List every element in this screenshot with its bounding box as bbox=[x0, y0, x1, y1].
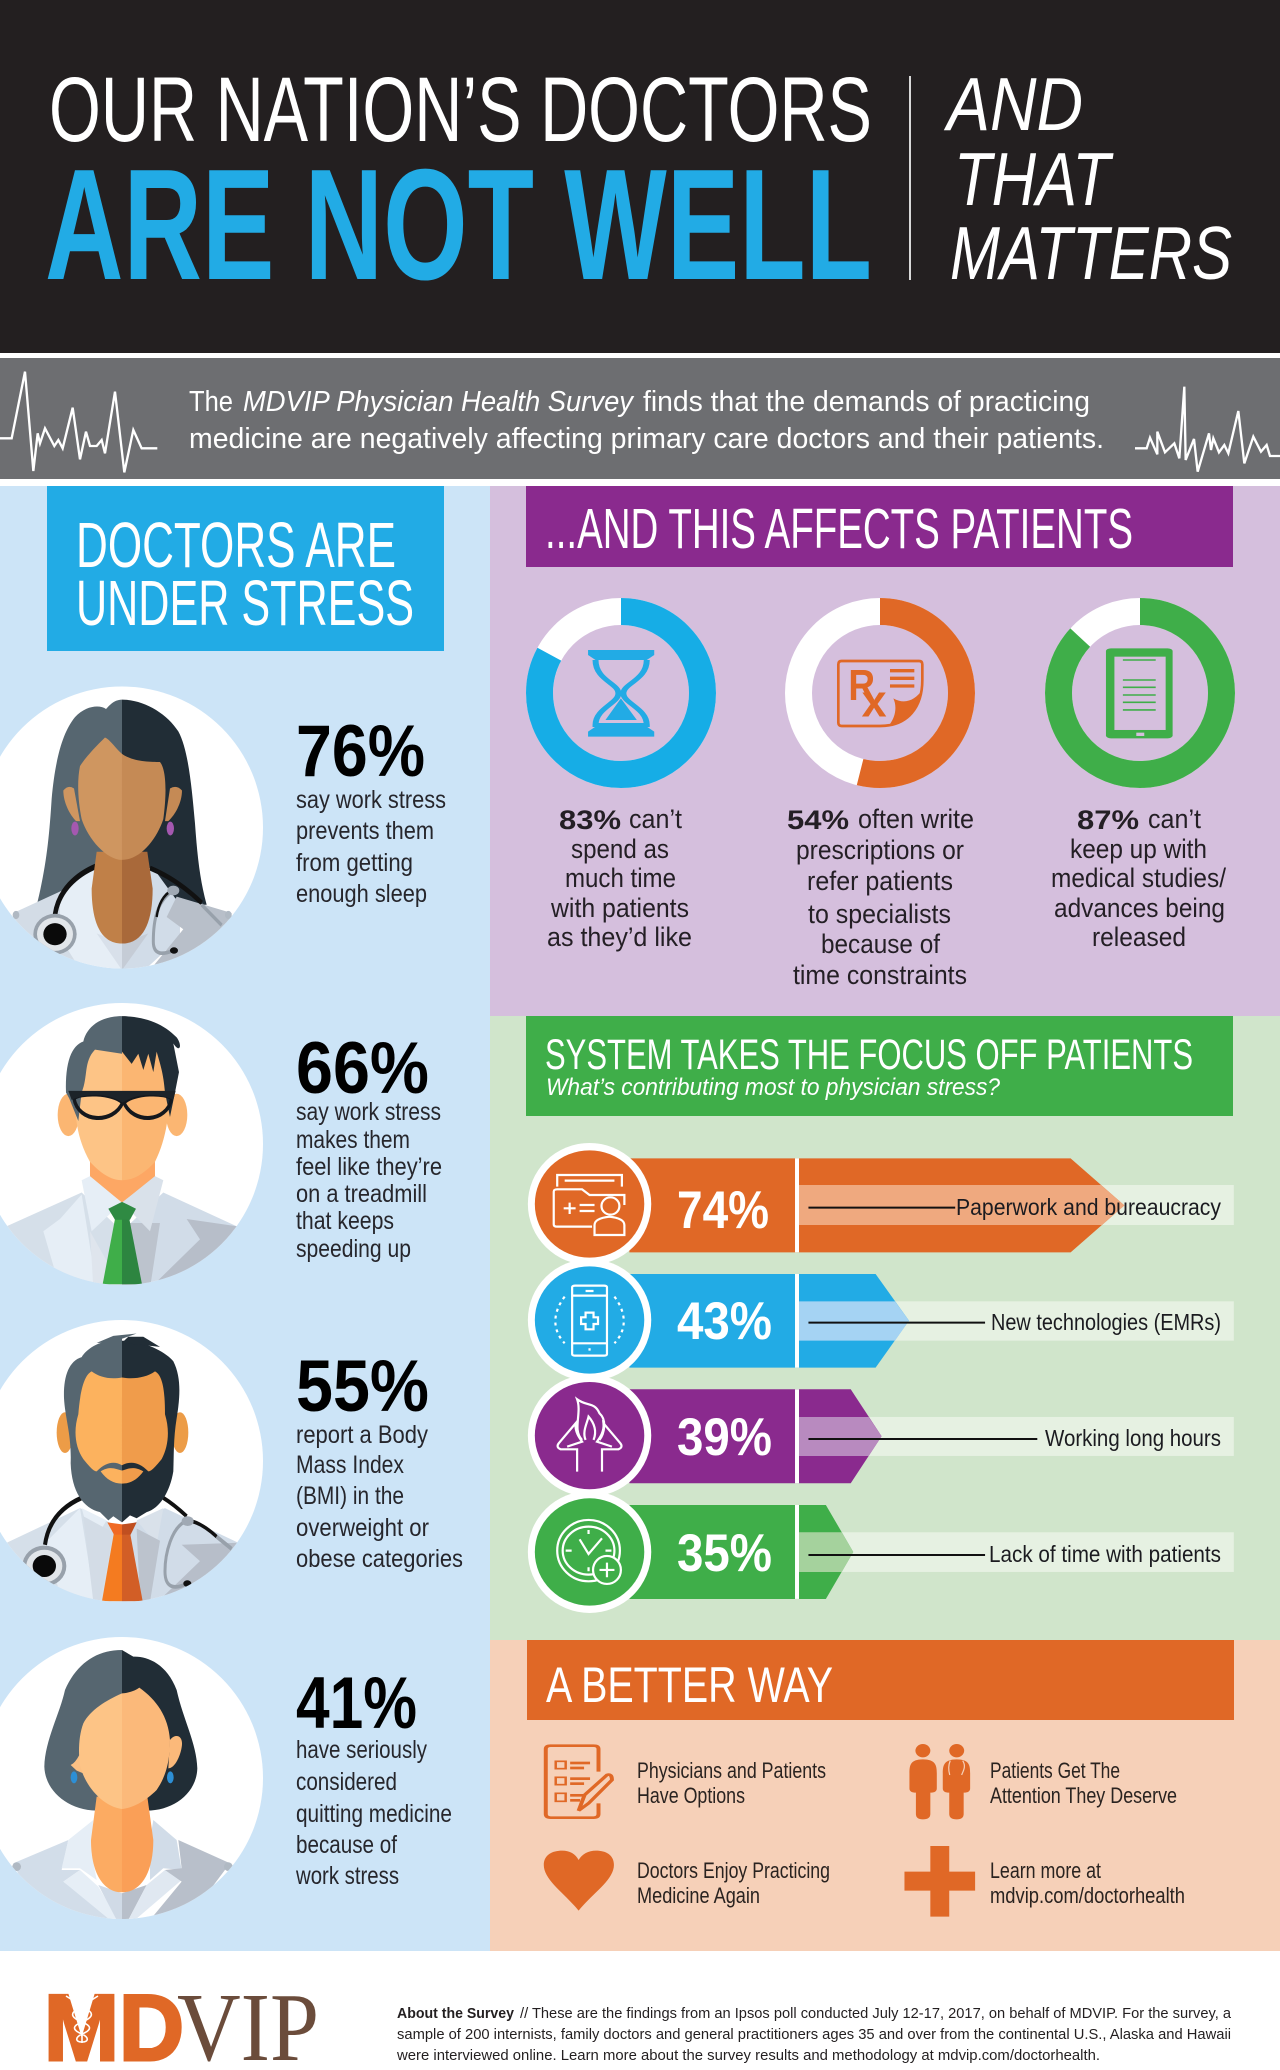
icon: right heartbeat line bbox=[1135, 387, 1280, 472]
item: enjoy medicine bbox=[544, 1851, 830, 1911]
stat 55%: 55% bbox=[296, 1346, 429, 1427]
doctor portrait 4 bbox=[0, 1637, 263, 1920]
title line one: OUR NATION’S DOCTORS bbox=[49, 59, 872, 161]
text: Doctors Enjoy Practicing bbox=[637, 1858, 830, 1883]
icon: tablet bbox=[1106, 648, 1173, 738]
stat 76% bbox=[296, 711, 446, 908]
about the survey text: sample of 200 internists, family doctors and general practitioners ages 35 and over from the continental U.S., Alaska and Hawaii bbox=[397, 2027, 1231, 2043]
stat 76%: enough sleep bbox=[296, 880, 427, 908]
intro text: MDVIP Physician Health Survey bbox=[243, 386, 634, 418]
stat 55%: (BMI) in the bbox=[296, 1482, 404, 1510]
header banner bbox=[0, 0, 1280, 353]
icon: prescription: R bbox=[848, 662, 875, 710]
intro text: medicine are negatively affecting primary care doctors and their patients. bbox=[189, 423, 1104, 455]
stat 76%: prevents them bbox=[296, 817, 434, 845]
bar: new technologies 43% bbox=[528, 1259, 1234, 1381]
about the survey text: // These are the findings from an Ipsos poll conducted July 12-17, 2017, on behalf of MDVIP. For the survey, a bbox=[520, 2006, 1232, 2022]
item: options bbox=[546, 1746, 826, 1818]
bar: paperwork 74% bbox=[528, 1143, 1234, 1265]
bar: working long hours 39%: Working long hours bbox=[1045, 1425, 1221, 1451]
text: refer patients bbox=[807, 866, 953, 896]
doctor portrait 2 bbox=[0, 1003, 263, 1288]
side title bbox=[944, 62, 1232, 295]
bar: working long hours 39%: 39% bbox=[677, 1408, 772, 1467]
text: Patients Get The bbox=[990, 1758, 1120, 1783]
text bbox=[547, 804, 692, 952]
donut chart 54% bbox=[787, 612, 974, 990]
heading: A BETTER WAY bbox=[546, 1657, 833, 1713]
donut chart 83% bbox=[540, 612, 702, 952]
icon: heart bbox=[544, 1851, 614, 1911]
panel: affects patients bbox=[490, 486, 1280, 1016]
about the survey text bbox=[396, 2006, 1232, 2064]
icon: cross bbox=[904, 1846, 975, 1917]
side title: THAT bbox=[954, 137, 1114, 221]
panel: doctors are under stress bbox=[0, 486, 490, 1951]
icon: hourglass bbox=[588, 650, 654, 737]
icon: doctor and patient bbox=[909, 1744, 970, 1819]
item: learn more bbox=[904, 1846, 1185, 1917]
text: can’t bbox=[1148, 804, 1201, 834]
bar chart bbox=[528, 1143, 1234, 1613]
bar: lack of time 35%: 35% bbox=[677, 1524, 772, 1583]
stat 66%: that keeps bbox=[296, 1207, 394, 1235]
text: time constraints bbox=[793, 960, 967, 990]
item: attention bbox=[909, 1744, 1177, 1819]
about the survey text: were interviewed online. Learn more about the survey results and methodology at mdvip.com/doctorhealth. bbox=[396, 2048, 1100, 2064]
stat 66%: speeding up bbox=[296, 1235, 411, 1263]
heading: UNDER STRESS bbox=[76, 567, 414, 639]
stat 76%: 76% bbox=[296, 711, 425, 792]
intro text: The bbox=[189, 386, 233, 418]
text: prescriptions or bbox=[796, 835, 964, 865]
intro band bbox=[0, 358, 1280, 479]
text: Learn more at bbox=[990, 1858, 1101, 1883]
stat 66%: say work stress bbox=[296, 1098, 441, 1126]
side title: AND bbox=[944, 62, 1083, 146]
text: can’t bbox=[629, 804, 682, 834]
text: because of bbox=[821, 929, 940, 959]
logo: MDVIP bbox=[44, 1974, 319, 2070]
bar: paperwork 74%: 74% bbox=[677, 1181, 769, 1240]
stat 41%: because of bbox=[296, 1831, 397, 1859]
heading bbox=[47, 486, 444, 651]
stat 41% bbox=[295, 1663, 452, 1890]
text: keep up with bbox=[1070, 834, 1207, 864]
stat 55%: Mass Index bbox=[296, 1451, 404, 1479]
icon: clock with plus bbox=[557, 1520, 621, 1584]
stat 55% bbox=[296, 1346, 463, 1573]
bar: lack of time 35% bbox=[528, 1491, 1234, 1613]
stat 41%: considered bbox=[296, 1768, 397, 1796]
panel: a better way bbox=[490, 1640, 1280, 1951]
bar: lack of time 35%: Lack of time with patients bbox=[989, 1541, 1221, 1567]
stat 41%: 41% bbox=[296, 1663, 417, 1744]
bar: new technologies 43%: New technologies (EMRs) bbox=[991, 1309, 1221, 1335]
text: to specialists bbox=[808, 899, 951, 929]
bar: paperwork 74%: Paperwork and bureaucracy bbox=[956, 1194, 1221, 1220]
stat 41%: have seriously bbox=[296, 1736, 427, 1764]
stat 41%: work stress bbox=[295, 1862, 399, 1890]
text: 87% bbox=[1077, 805, 1139, 835]
text: Physicians and Patients bbox=[637, 1758, 826, 1783]
heading bbox=[527, 1640, 1234, 1720]
stat 66% bbox=[296, 1028, 442, 1263]
icon: prescription: x bbox=[862, 676, 887, 727]
donut chart 87% bbox=[1051, 612, 1226, 952]
icon: prescription bbox=[838, 661, 922, 727]
text: with patients bbox=[550, 893, 689, 923]
stat 66%: 66% bbox=[296, 1028, 429, 1109]
item: attention: Attention They Deserve bbox=[990, 1783, 1177, 1808]
icon: folder and patient bbox=[554, 1175, 624, 1235]
doctor portrait 3 bbox=[0, 1320, 263, 1606]
stat 66%: on a treadmill bbox=[296, 1180, 427, 1208]
text: advances being bbox=[1054, 893, 1225, 923]
bar: new technologies 43%: 43% bbox=[677, 1292, 772, 1351]
text: released bbox=[1092, 922, 1186, 952]
about the survey text: About the Survey bbox=[397, 2006, 514, 2022]
stat 66%: makes them bbox=[296, 1126, 410, 1154]
text: spend as bbox=[571, 834, 669, 864]
stat 76%: from getting bbox=[296, 849, 413, 877]
text: 54% bbox=[787, 805, 849, 835]
text: medical studies/ bbox=[1051, 863, 1226, 893]
divider bbox=[909, 76, 911, 280]
icon: burnout figure bbox=[558, 1399, 622, 1472]
text bbox=[787, 804, 974, 990]
stat 41%: quitting medicine bbox=[296, 1800, 452, 1828]
text bbox=[1051, 804, 1226, 952]
item: enjoy medicine: Medicine Again bbox=[637, 1883, 760, 1908]
heading: DOCTORS ARE bbox=[76, 509, 396, 581]
intro text bbox=[189, 386, 1104, 455]
icon: left heartbeat line bbox=[0, 372, 157, 472]
item: options: Have Options bbox=[637, 1783, 745, 1808]
stat 76%: say work stress bbox=[296, 786, 446, 814]
text: often write bbox=[858, 804, 974, 834]
text: much time bbox=[565, 863, 676, 893]
text: as they’d like bbox=[547, 922, 692, 952]
stat 55%: obese categories bbox=[296, 1545, 463, 1573]
panel: system takes focus off patients bbox=[490, 1016, 1280, 1640]
doctor portrait 1 bbox=[0, 686, 263, 974]
stat 55%: overweight or bbox=[296, 1514, 429, 1542]
text: 83% bbox=[559, 805, 621, 835]
title line two: ARE NOT WELL bbox=[45, 137, 872, 313]
item: learn more: mdvip.com/doctorhealth bbox=[990, 1883, 1185, 1908]
bar: working long hours 39% bbox=[528, 1375, 1234, 1497]
heading bbox=[526, 1016, 1233, 1116]
stat 66%: feel like they’re bbox=[296, 1153, 442, 1181]
icon: phone with medical cross bbox=[555, 1286, 624, 1356]
stat 55%: report a Body bbox=[296, 1421, 428, 1449]
icon: checklist and pencil bbox=[546, 1746, 612, 1818]
intro text: finds that the demands of practicing bbox=[643, 386, 1090, 418]
heading: What’s contributing most to physician stress? bbox=[546, 1074, 1001, 1101]
